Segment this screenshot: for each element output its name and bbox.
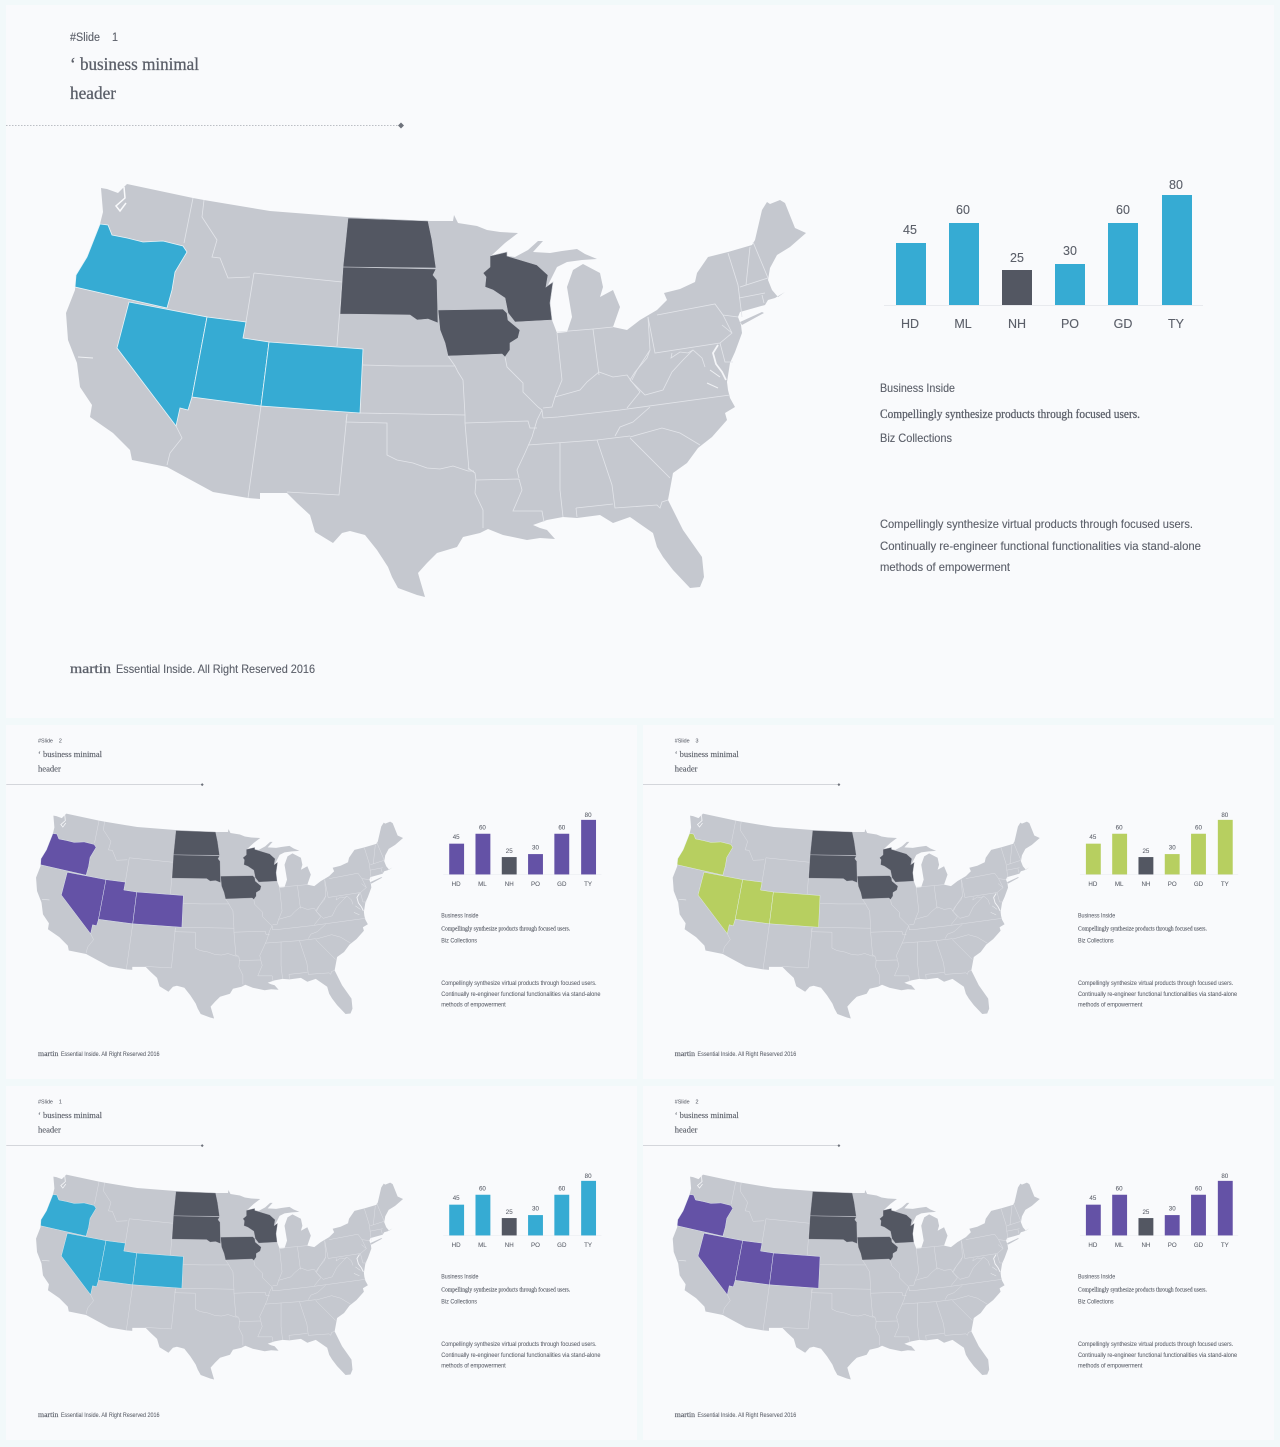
slide panel: small slide 2 purple: ‘ business minimal <box>38 749 103 759</box>
slide panel: small slide 1 blue: Business Inside <box>441 1275 479 1281</box>
slide panel: small slide 2 purple: Compellingly synthesize products through focused users. <box>441 925 571 932</box>
slide panel: small slide 2 purple repeat: methods of empowerment <box>1078 1363 1143 1369</box>
slide panel: small slide 1 blue: TY <box>584 1242 592 1249</box>
slide panel: small slide 1 blue: methods of empowerment <box>441 1363 506 1369</box>
slide panel: small slide 3 green <box>643 725 1274 1079</box>
slide panel: small slide 3 green: Biz Collections <box>1078 938 1114 944</box>
slide panel: small slide 3 green: Compellingly synthesize products through focused users. <box>1078 925 1207 932</box>
slide panel: small slide 1 blue: Essential Inside. All Right Reserved 2016 <box>61 1413 160 1419</box>
bar chart: GD <box>1114 317 1132 331</box>
slide panel: small slide 3 green: 30 <box>1169 845 1176 852</box>
slide panel: small slide 2 purple repeat: Continually re-engineer functional functionalities via stand-alone <box>1078 1353 1238 1359</box>
bar chart: 60 <box>1116 203 1130 217</box>
slide panel: small slide 3 green: 25 <box>1142 848 1150 855</box>
slide panel: small slide 2 purple: ML <box>478 881 487 888</box>
slide panel: small slide 2 purple: 80 <box>585 812 592 819</box>
slide panel: small slide 2 purple repeat: Essential Inside. All Right Reserved 2016 <box>698 1413 797 1419</box>
slide panel: small slide 1 blue: ML <box>478 1242 487 1249</box>
slide number: #Slide 1 <box>70 32 118 44</box>
slide panel: small slide 2 purple: 30 <box>532 845 540 852</box>
slide panel: small slide 1 blue: PO <box>531 1242 540 1249</box>
slide panel: small slide 2 purple repeat: 80 <box>1221 1173 1229 1180</box>
slide panel: small slide 3 green: GD <box>1194 881 1204 888</box>
text block: business inside: Biz Collections <box>880 431 952 445</box>
slide panel: small slide 2 purple: 25 <box>506 848 513 855</box>
slide panel: small slide 2 purple <box>6 725 637 1079</box>
slide panel: small slide 1 blue: 80 <box>585 1173 592 1180</box>
slide panel: small slide 3 green: 60 <box>1195 824 1202 831</box>
slide panel: small slide 2 purple repeat: 25 <box>1142 1209 1150 1216</box>
slide panel: small slide 1 blue: 45 <box>453 1195 460 1202</box>
slide panel: small slide 1 blue: GD <box>557 1242 567 1249</box>
slide panel: small slide 2 purple: Business Inside <box>441 914 479 920</box>
slide panel: small slide 3 green: 45 <box>1089 834 1097 841</box>
slide panel: small slide 1 blue: 30 <box>532 1206 540 1213</box>
slide panel: small slide 2 purple repeat: PO <box>1168 1242 1177 1249</box>
slide panel: small slide 1 blue: Biz Collections <box>441 1299 477 1305</box>
slide panel: small slide 2 purple: 60 <box>558 824 566 831</box>
slide panel: small slide 3 green: Business Inside <box>1078 914 1116 920</box>
slide panel: small slide 3 green: ‘ business minimal <box>675 749 739 759</box>
slide panel: small slide 2 purple repeat <box>643 1086 1274 1440</box>
heading: header <box>70 83 116 103</box>
bar chart: 80 <box>1169 178 1183 192</box>
slide panel: small slide 3 green: Essential Inside. All Right Reserved 2016 <box>698 1052 797 1058</box>
bar chart: PO <box>1061 317 1079 331</box>
slide panel: small slide 1 blue: ‘ business minimal <box>38 1110 103 1120</box>
footer: Essential Inside. All Right Reserved 2016 <box>116 662 315 676</box>
slide panel: small slide 2 purple: NH <box>505 881 514 888</box>
slide panel: small slide 2 purple repeat: 60 <box>1195 1185 1202 1192</box>
slide panel: small slide 3 green: PO <box>1168 881 1177 888</box>
slide panel: small slide 3 green: 60 <box>1116 824 1123 831</box>
slide panel: small slide 3 green: NH <box>1141 881 1150 888</box>
footer: martin <box>70 662 111 677</box>
slide panel: small slide 3 green: Compellingly synthesize virtual products through focused users. <box>1078 981 1234 987</box>
text block: description <box>880 517 1201 574</box>
bar chart: 25 <box>1010 251 1024 265</box>
slide panel: small slide 2 purple: martin <box>38 1050 59 1058</box>
text block: description: Continually re-engineer functional functionalities via stand-alone <box>880 539 1201 553</box>
slide panel: small slide 3 green: header <box>675 764 698 774</box>
bar chart: 30 <box>1063 244 1077 258</box>
bar chart: 60 <box>956 203 970 217</box>
slide panel: small slide 3 green: ML <box>1115 881 1124 888</box>
slide panel: small slide 2 purple repeat: header <box>675 1125 698 1135</box>
text block: business inside <box>880 381 1140 445</box>
slide panel: small slide 3 green: #Slide 3 <box>675 739 699 745</box>
slide panel: small slide 1 blue: Continually re-engineer functional functionalities via stand-alone <box>441 1353 601 1359</box>
slide panel: small slide 3 green: Continually re-engineer functional functionalities via stand-alone <box>1078 992 1238 998</box>
slide panel: small slide 2 purple repeat: GD <box>1194 1242 1204 1249</box>
slide panel: small slide 2 purple: methods of empowerment <box>441 1002 506 1008</box>
slide panel: small slide 1 blue <box>6 1086 637 1440</box>
slide panel: small slide 2 purple repeat: HD <box>1088 1242 1098 1249</box>
slide panel: small slide 1 blue: header <box>38 1125 61 1135</box>
slide panel: small slide 2 purple: PO <box>531 881 540 888</box>
slide panel: small slide 2 purple repeat: martin <box>675 1411 696 1419</box>
slide panel: small slide 1 blue: Compellingly synthesize products through focused users. <box>441 1286 571 1293</box>
heading: ‘ business minimal <box>70 54 199 74</box>
slide panel: small slide 2 purple repeat: Compellingly synthesize virtual products through focused users. <box>1078 1342 1234 1348</box>
bar chart <box>884 178 1203 331</box>
US map with highlighted states <box>66 184 806 597</box>
slide panel: small slide 3 green: martin <box>675 1050 696 1058</box>
slide panel: small slide 2 purple: header <box>38 764 61 774</box>
slide panel: small slide 1 blue: 60 <box>479 1185 486 1192</box>
slide panel: small slide 1 blue: #Slide 1 <box>38 1100 62 1106</box>
header rule with diamond marker <box>6 122 404 128</box>
slide panel: small slide 2 purple: Compellingly synthesize virtual products through focused users. <box>441 981 597 987</box>
bar chart: NH <box>1008 317 1026 331</box>
slide panel: small slide 2 purple repeat: 45 <box>1089 1195 1097 1202</box>
slide panel: small slide 2 purple repeat: Compellingly synthesize products through focused users. <box>1078 1286 1207 1293</box>
text block: description: methods of empowerment <box>880 560 1011 574</box>
slide panel: small slide 1 blue: NH <box>505 1242 514 1249</box>
heading <box>70 54 199 103</box>
bar chart: ML <box>954 317 972 331</box>
slide panel: small slide 2 purple repeat: ‘ business minimal <box>675 1110 739 1120</box>
text block: business inside: Business Inside <box>880 381 955 395</box>
slide panel: small slide 3 green: methods of empowerment <box>1078 1002 1143 1008</box>
slide panel: small slide 2 purple repeat: NH <box>1141 1242 1150 1249</box>
slide panel: small slide 2 purple repeat: TY <box>1221 1242 1229 1249</box>
slide panel: small slide 1 blue: 25 <box>506 1209 513 1216</box>
slide panel: small slide 2 purple: HD <box>452 881 461 888</box>
slide panel: small slide 2 purple: Continually re-engineer functional functionalities via stand-alone <box>441 992 601 998</box>
slide panel: small slide 3 green: HD <box>1088 881 1098 888</box>
slide panel: small slide 2 purple repeat: Business Inside <box>1078 1275 1116 1281</box>
slide panel: small slide 2 purple repeat: #Slide 2 <box>675 1100 699 1106</box>
slide panel: small slide 2 purple repeat: ML <box>1115 1242 1124 1249</box>
slide panel: small slide 2 purple: Biz Collections <box>441 938 477 944</box>
slide panel: small slide 1 blue: martin <box>38 1411 59 1419</box>
slide panel: small slide 2 purple repeat: Biz Collections <box>1078 1299 1114 1305</box>
bar chart: HD <box>901 317 919 331</box>
text block: business inside: Compellingly synthesize products through focused users. <box>880 407 1140 421</box>
bar chart: TY <box>1168 317 1185 331</box>
slide panel: small slide 1 blue: 60 <box>558 1185 566 1192</box>
slide panel: small slide 2 purple: #Slide 2 <box>38 739 62 745</box>
slide panel: small slide 2 purple repeat: 30 <box>1169 1206 1176 1213</box>
slide panel: small slide 2 purple: Essential Inside. All Right Reserved 2016 <box>61 1052 160 1058</box>
slide panel: small slide 2 purple repeat: 60 <box>1116 1185 1123 1192</box>
slide panel: small slide 3 green: TY <box>1221 881 1229 888</box>
slide panel: small slide 2 purple: GD <box>557 881 567 888</box>
slide panel: small slide 2 purple: 60 <box>479 824 486 831</box>
text block: description: Compellingly synthesize virtual products through focused users. <box>880 517 1193 531</box>
slide panel: small slide 2 purple: TY <box>584 881 592 888</box>
slide panel: small slide 2 purple: 45 <box>453 834 460 841</box>
slide panel: small slide 1 blue: Compellingly synthesize virtual products through focused users. <box>441 1342 597 1348</box>
slide panel: small slide 1 blue: HD <box>452 1242 461 1249</box>
slide panel: small slide 3 green: 80 <box>1221 812 1229 819</box>
slide panel: main slide 1 <box>6 5 1274 718</box>
bar chart: 45 <box>903 223 917 237</box>
